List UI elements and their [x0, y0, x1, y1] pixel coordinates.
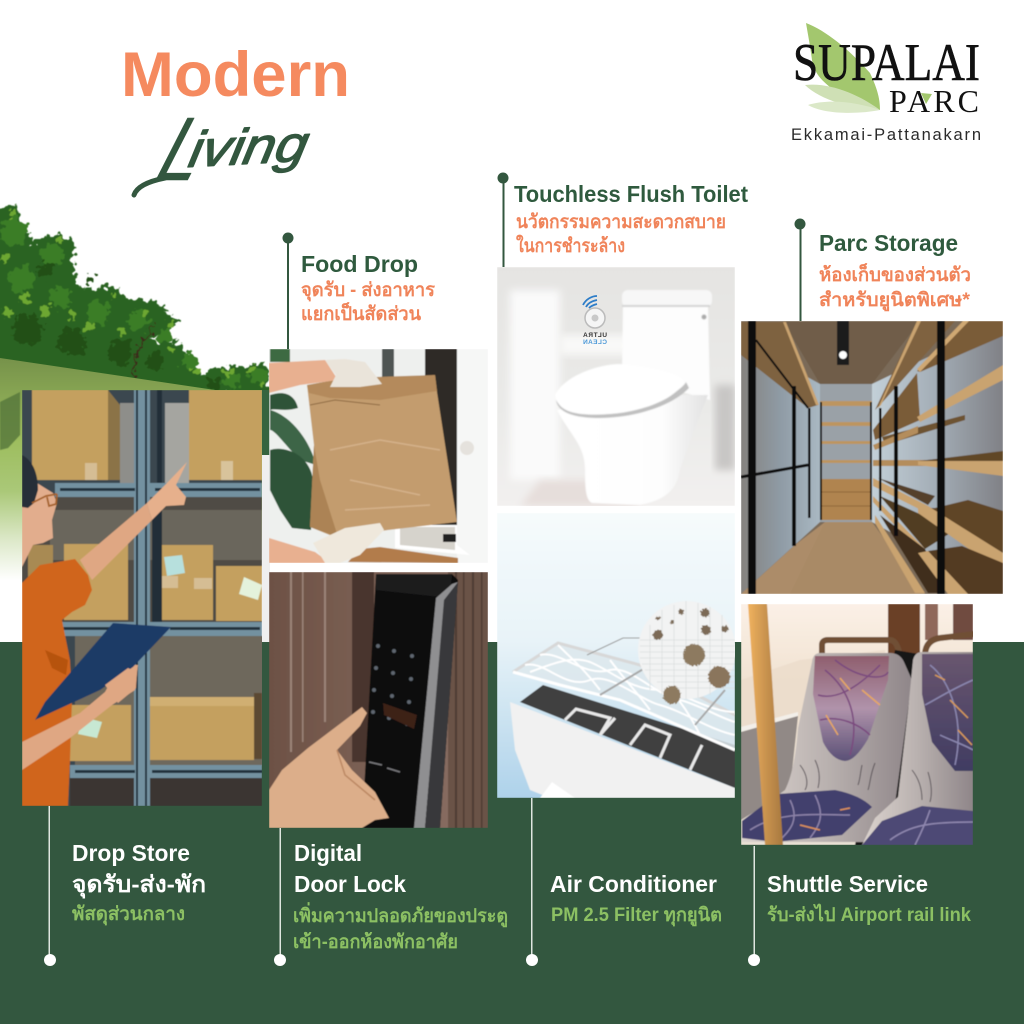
cardboard boxes: [32, 390, 262, 761]
connector: touchless toilet: [498, 172, 508, 267]
vertical pole: [748, 604, 783, 845]
connector: food drop: [282, 232, 294, 349]
photo: drop store shelves: [22, 390, 265, 806]
hair: [22, 455, 38, 508]
ceiling light: [837, 321, 849, 365]
right wall: [871, 336, 1003, 552]
window frames: [888, 604, 920, 660]
label: digital door lock: [293, 840, 508, 953]
toilet bowl: [557, 395, 708, 505]
lower arm and glove: [269, 538, 330, 563]
right seat shell: [862, 652, 973, 845]
title: Living: [140, 99, 314, 199]
label: parc storage: [819, 230, 971, 312]
metal shelf rails: [55, 390, 262, 806]
lower wall: [741, 716, 798, 820]
left seat cushion: [742, 790, 872, 842]
label: food drop: จุดรับ - ส่งอาหาร: [301, 280, 436, 302]
left posts: [748, 321, 872, 594]
label: digital door lock: Digital: [294, 840, 362, 866]
label: food drop: [301, 251, 436, 325]
label: shuttle service: Shuttle Service: [767, 871, 928, 897]
title flourish: [134, 178, 165, 195]
woman pointing: [22, 455, 187, 806]
back wall: [820, 384, 872, 522]
label: food drop: Food Drop: [301, 251, 418, 277]
left seat shell: [742, 653, 912, 842]
title: Modern: Modern: [121, 40, 350, 110]
label: air conditioner: Air Conditioner: [550, 871, 717, 897]
dark gap between seats: [855, 650, 925, 845]
label: digital door lock: เพิ่มความปลอดภัยของประตู: [293, 902, 508, 928]
drawer cabinet: [820, 479, 872, 520]
photo: shuttle bus seats: [741, 604, 975, 845]
photo: air conditioner pm2.5 filter: [497, 513, 736, 798]
paper bag: [307, 375, 457, 538]
sticky notes: [164, 555, 185, 576]
left top shelf: [741, 322, 818, 408]
magnified dust circle: [638, 601, 736, 704]
label: shuttle service: รับ-ส่งไป Airport rail link: [767, 903, 971, 926]
hand: [147, 462, 187, 520]
seat shadow: [556, 382, 689, 418]
label: drop store: [72, 840, 206, 926]
left wall: [741, 340, 820, 594]
face and neck: [22, 483, 57, 567]
lock body: [362, 574, 458, 828]
label: digital door lock: เข้า-ออกห้องพักอาศัย: [293, 931, 458, 953]
logo: Supalai Parc: [791, 23, 981, 144]
logo sub-mark: PARC: [889, 83, 979, 119]
background: white upper area: [0, 0, 1024, 642]
label: touchless flush toilet: Touchless Flush Toilet: [514, 181, 748, 207]
label: touchless flush toilet: นวัตกรรมความสะดวกสบาย: [516, 212, 726, 233]
tree shadow on hill: [0, 392, 20, 450]
label: parc storage: Parc Storage: [819, 230, 958, 256]
label: food drop: แยกเป็นสัดส่วน: [301, 301, 421, 325]
logo wordmark: SUPALAI: [793, 34, 980, 92]
label: shuttle service: [767, 871, 971, 926]
keypad digits: [371, 644, 414, 726]
logo location: Ekkamai-Pattanakarn: [791, 126, 981, 144]
mesh filter cover: [513, 643, 735, 750]
label: drop store: Drop Store: [72, 840, 190, 866]
title: Living: iving: [185, 115, 314, 178]
orange shirt: [22, 559, 92, 806]
pale strip beside first card: [262, 455, 270, 642]
back shelves: [820, 401, 872, 463]
upper arm and glove: [269, 360, 338, 393]
photo: touchless flush toilet: [497, 267, 735, 506]
label: air conditioner: [550, 871, 722, 927]
connector: door lock: [274, 828, 286, 966]
title: [121, 40, 350, 199]
forearm: [22, 665, 138, 770]
seat handles: [822, 634, 975, 656]
floor: [790, 522, 925, 594]
background: dark green lower band: [0, 642, 1024, 1024]
label: parc storage: ห้องเก็บของส่วนตัว: [819, 262, 971, 286]
sensor icon: CLEAN: [583, 339, 607, 346]
right seat cushion: [862, 806, 973, 845]
logo accent: [921, 93, 932, 104]
label: drop store: จุดรับ-ส่ง-พัก: [72, 871, 206, 899]
sensor icon: ULTRA: [583, 332, 607, 339]
connector: air conditioner: [526, 798, 538, 966]
label: drop store: พัสดุส่วนกลาง: [72, 904, 185, 926]
label: touchless flush toilet: ในการชำระล้าง: [516, 234, 625, 257]
hill green patch beside first card: [262, 390, 270, 455]
raised arm: [80, 503, 152, 580]
plant leaves: [270, 349, 316, 530]
left seat back fabric: [813, 656, 889, 761]
photo: digital door lock: [269, 572, 488, 828]
glasses: [32, 494, 57, 506]
tree line illustration: [0, 205, 270, 395]
window sill: [741, 712, 798, 732]
toilet tank: [622, 305, 710, 400]
label: digital door lock: Door Lock: [294, 871, 406, 897]
compartment ribs: [565, 709, 702, 770]
photo: food drop paper bag: [269, 349, 488, 563]
hill gradient behind cards: [0, 358, 262, 600]
ceiling: [783, 321, 920, 384]
photo: parc storage room: [741, 321, 1003, 594]
connector: drop store: [44, 806, 56, 966]
connector: shuttle: [748, 846, 760, 966]
right seat back fabric: [922, 654, 973, 771]
sensor icon: [583, 296, 607, 346]
indoor unit white body: [510, 702, 735, 798]
label: parc storage: สำหรับยูนิตพิเศษ*: [819, 290, 971, 312]
filter compartment: [520, 685, 735, 788]
label: touchless flush toilet: [514, 181, 748, 257]
clipboard: [35, 623, 171, 720]
hand pressing keypad: [269, 707, 389, 828]
logo leaf: [805, 23, 880, 113]
connector: parc storage: [794, 218, 806, 321]
title: Living: L: [140, 99, 231, 199]
toilet seat: [555, 364, 684, 415]
right shelves: [873, 321, 1003, 594]
label: air conditioner: PM 2.5 Filter ทุกยูนิต: [551, 905, 722, 927]
